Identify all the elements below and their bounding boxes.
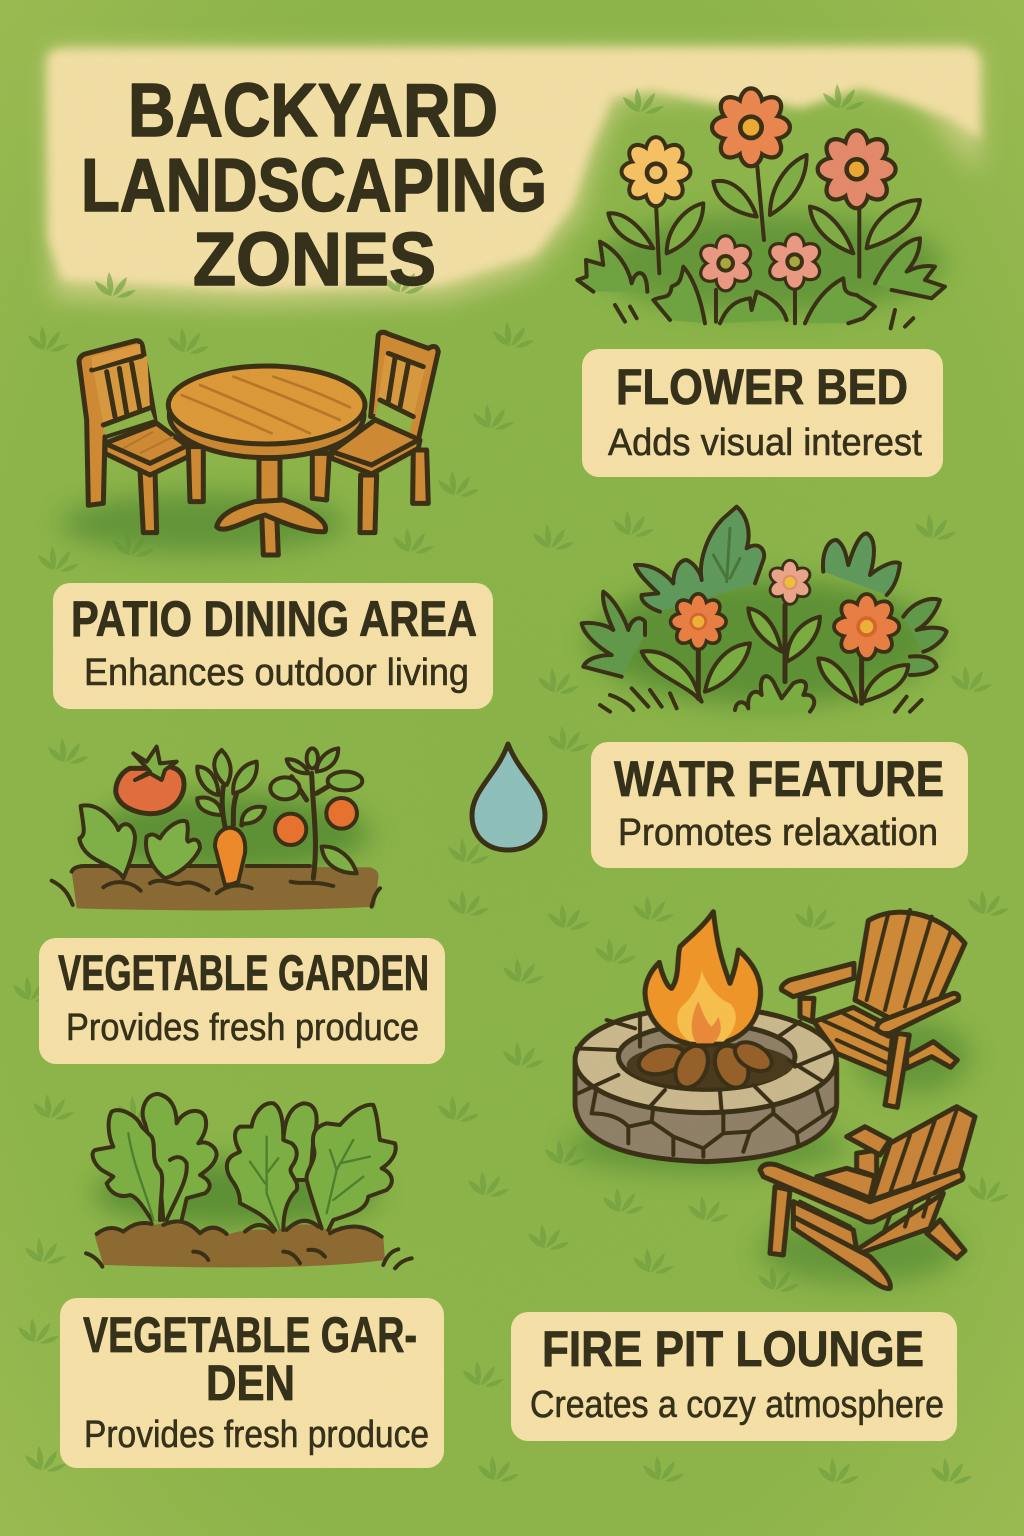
panel [60,1298,444,1468]
soil edge lines [86,1221,412,1268]
label: water feature [591,742,968,868]
flowers [672,596,724,648]
heading: FIRE PIT LOUNGE [542,1321,924,1377]
title banner background [47,47,980,306]
right chair [312,332,438,533]
soil [95,1223,385,1267]
adirondack chair: front [760,1107,975,1288]
spinach [79,805,200,878]
left plant [93,1094,217,1220]
panel [582,349,943,477]
description: Creates a cozy atmosphere [530,1384,944,1426]
outer leaves [582,592,947,677]
soil [72,866,379,910]
heading: FLOWER BED [616,359,908,415]
tomato [116,747,184,814]
description: Provides fresh produce [66,1007,419,1049]
flowers [623,139,688,204]
panel [39,938,445,1064]
title: LANDSCAPING [81,143,547,227]
description: Enhances outdoor living [84,652,469,694]
label: fire pit lounge [511,1312,957,1441]
pedestal [217,458,326,555]
heading: PATIO DINING AREA [71,591,477,647]
heading: WATR FEATURE [614,751,944,807]
icon: water drop [472,744,545,850]
panel [511,1312,957,1441]
illustration: shrubs and flowers [582,507,947,712]
logs [636,1036,777,1093]
title: BACKYARD [128,68,498,152]
label: vegetable garden [39,938,445,1064]
illustration: vegetable bed [52,747,380,910]
title [81,68,547,301]
label: flower bed [582,349,943,477]
front leaves [642,608,908,712]
description: Adds visual interest [608,422,922,464]
left chair [79,341,203,533]
illustration: fire pit and lounge chairs [567,910,975,1288]
label: vegetable garden, second: DEN [206,1355,295,1411]
illustration: flower bed [577,90,945,328]
stone ring [575,1007,837,1162]
illustration: patio dining set [60,332,438,555]
label: vegetable garden, second [60,1298,444,1468]
label: patio dining area [53,583,493,709]
shrub shadow [590,578,937,705]
carrot [197,750,265,885]
panel [53,583,493,709]
grass blades [577,238,945,323]
adirondack chair: back right [781,910,965,1107]
shadows [567,1020,970,1283]
heading: VEGETABLE GARDEN [58,945,429,1001]
leaf veins [128,1133,370,1230]
faded tufts on title banner [95,84,864,298]
flame [645,912,761,1045]
panel [591,742,968,868]
right plant [227,1103,396,1230]
description: Promotes relaxation [618,812,938,854]
description: Provides fresh produce [84,1414,429,1456]
title: ZONES [193,217,436,301]
background leaves [635,507,900,612]
grass tufts [13,322,1009,1484]
table top [168,366,365,458]
illustration: leafy greens bed [86,1094,412,1268]
shadow [90,793,370,873]
heading: VEGETABLE GAR- [83,1307,417,1363]
shadow [60,493,347,553]
leaves [608,155,920,253]
stems [698,605,862,703]
shadow [93,1160,380,1227]
tomato plant [270,748,362,878]
soft shadow behind flowers [597,213,943,313]
